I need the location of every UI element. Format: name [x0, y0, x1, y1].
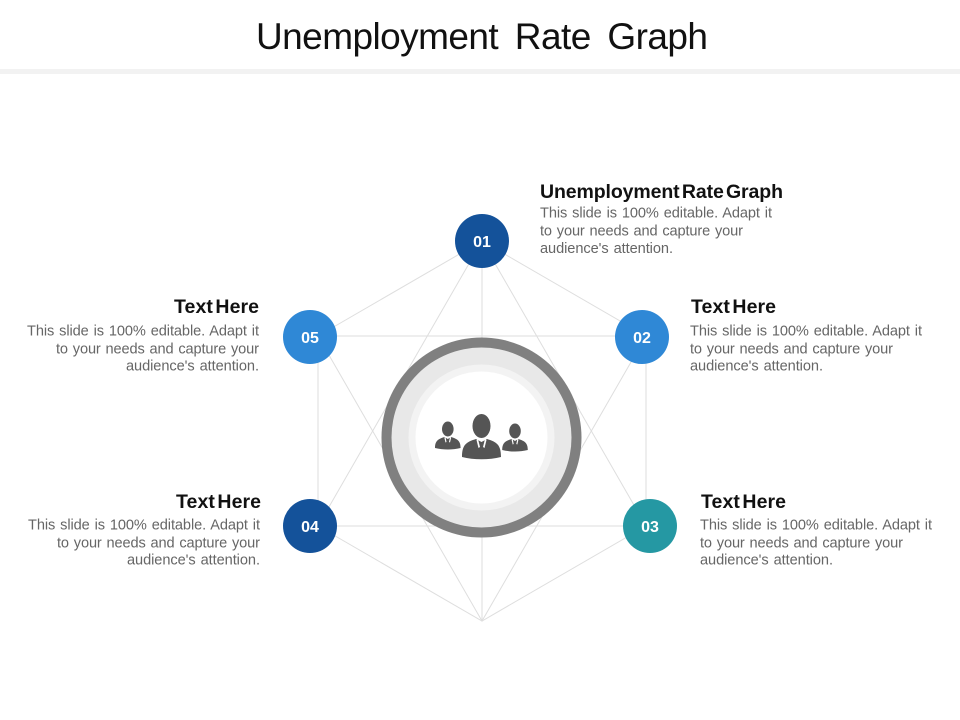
- text block 02: audience's attention.: [690, 358, 823, 374]
- node 05: 05: [301, 330, 319, 347]
- title underline band: [0, 69, 960, 74]
- text block 04: [28, 491, 261, 568]
- icon: three business people: [435, 414, 528, 459]
- text block 02: [690, 296, 922, 374]
- text block 02: Text Here: [691, 296, 776, 318]
- text block 04: audience's attention.: [127, 552, 260, 568]
- text block 01: to your needs and capture your: [540, 224, 743, 240]
- text block 04: This slide is 100% editable. Adapt it: [28, 518, 260, 534]
- text block 03: This slide is 100% editable. Adapt it: [700, 518, 932, 534]
- text block 03: audience's attention.: [700, 552, 833, 568]
- text block 01: audience's attention.: [540, 241, 673, 257]
- text block 04: to your needs and capture your: [57, 536, 260, 552]
- node 03: 03: [641, 519, 659, 536]
- network lines: [318, 241, 646, 621]
- node 02: [615, 310, 669, 364]
- text block 04: Text Here: [176, 491, 261, 513]
- node 01: 01: [473, 234, 491, 251]
- text block 05: audience's attention.: [126, 358, 259, 374]
- text block 01: Unemployment Rate Graph: [540, 181, 783, 203]
- node 01: [455, 214, 509, 268]
- node 04: 04: [301, 519, 319, 536]
- title: Unemployment Rate Graph: [256, 16, 708, 57]
- text block 05: [27, 296, 259, 374]
- node 05: [283, 310, 337, 364]
- text block 01: [540, 181, 783, 257]
- text block 05: Text Here: [174, 296, 259, 318]
- node 02: 02: [633, 330, 651, 347]
- text block 03: [700, 491, 932, 568]
- text block 05: to your needs and capture your: [56, 342, 259, 358]
- text block 02: This slide is 100% editable. Adapt it: [690, 324, 922, 340]
- text block 03: to your needs and capture your: [700, 536, 903, 552]
- text block 05: This slide is 100% editable. Adapt it: [27, 324, 259, 340]
- node 03: [623, 499, 677, 553]
- node 04: [283, 499, 337, 553]
- text block 01: This slide is 100% editable. Adapt it: [540, 206, 772, 222]
- central ring: [382, 338, 582, 538]
- text block 02: to your needs and capture your: [690, 342, 893, 358]
- text block 03: Text Here: [701, 491, 786, 513]
